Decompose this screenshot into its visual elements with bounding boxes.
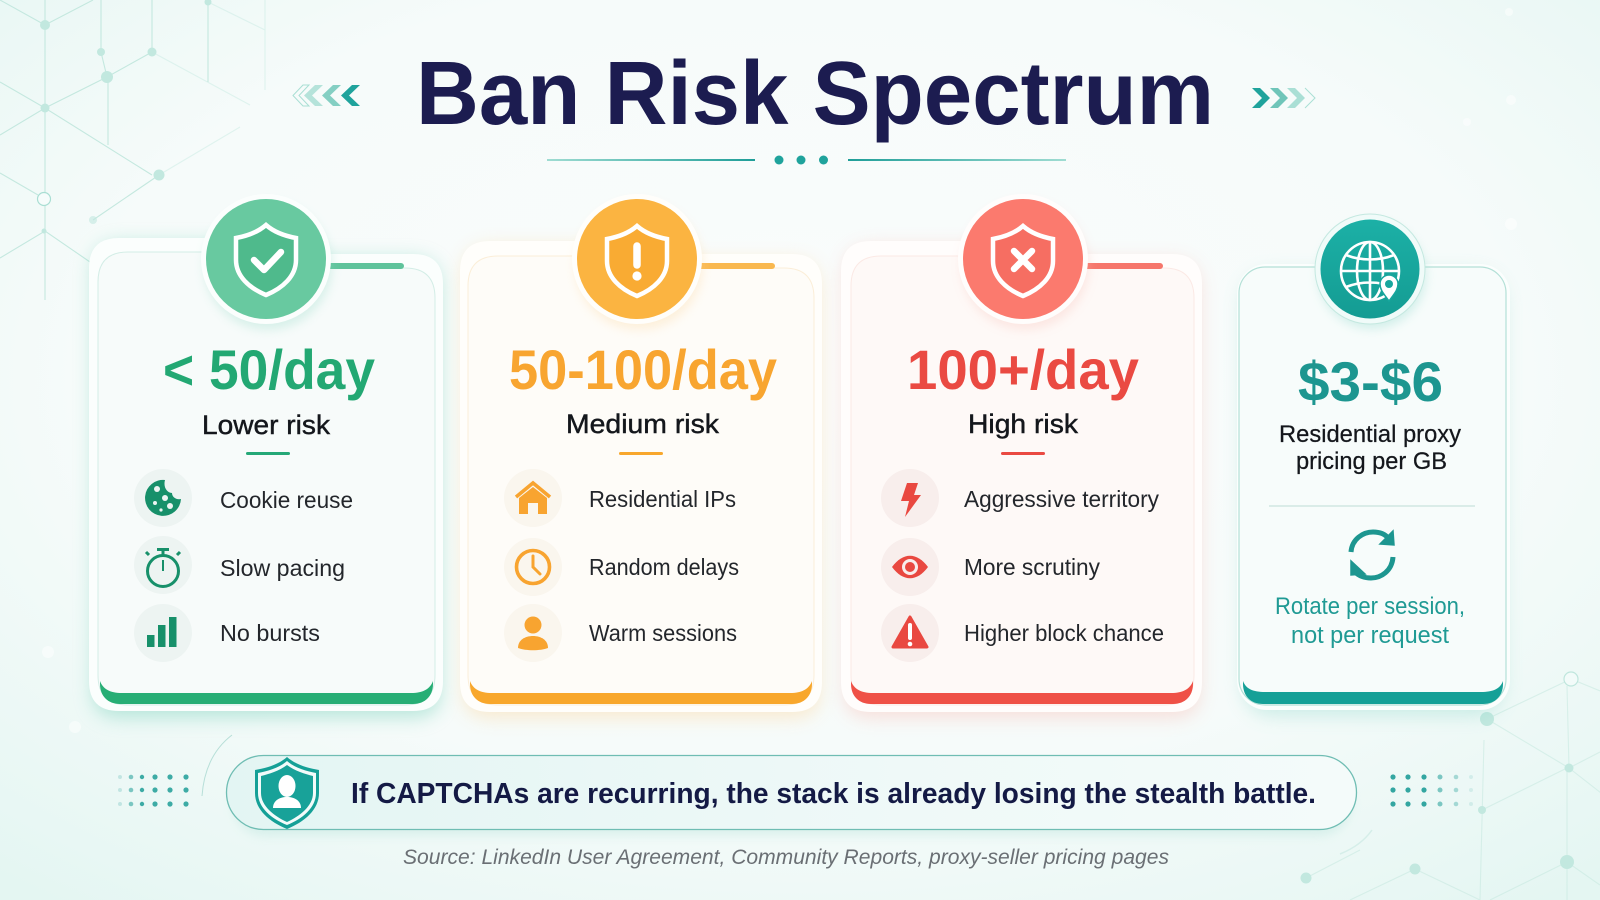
accent line: green <box>325 263 404 269</box>
bottom bar: red <box>851 681 1193 704</box>
accent line: orange <box>695 263 775 269</box>
bottom bar: orange <box>470 681 812 704</box>
stat: medium risk: 50-100/day <box>509 338 777 401</box>
icon: right chevrons <box>1252 88 1315 108</box>
text: proxy pricing: Residential proxy <box>1279 421 1461 448</box>
icon: clock <box>504 538 562 596</box>
icon: rotate arrows <box>1351 531 1394 578</box>
decorative dots right <box>1390 774 1473 807</box>
text: per gb: pricing per GB <box>1296 448 1447 475</box>
accent line: red <box>1080 263 1163 269</box>
stat: lower risk: < 50/day <box>163 338 375 401</box>
panel: lower risk <box>89 194 443 718</box>
panel: proxy pricing <box>1237 214 1510 716</box>
text: more scrutiny: More scrutiny <box>964 554 1100 580</box>
callout text: If CAPTCHAs are recurring, the stack is already losing the stealth battle. <box>351 778 1316 810</box>
text: random delays: Random delays <box>589 554 739 580</box>
icon: eye <box>881 538 939 596</box>
title divider <box>547 156 1066 164</box>
icon: shield user <box>255 757 319 829</box>
text: warm sessions: Warm sessions <box>589 620 737 646</box>
panel: high risk <box>841 194 1202 718</box>
icon: person <box>504 604 562 662</box>
icon: globe pin <box>1315 214 1426 329</box>
icon: shield alert <box>572 194 703 330</box>
icon: bolt <box>881 469 939 527</box>
icon: shield check <box>201 194 332 330</box>
text: no bursts: No bursts <box>220 620 320 646</box>
icon: bars <box>134 604 192 662</box>
icon: warning <box>881 604 939 662</box>
text: cookie reuse: Cookie reuse <box>220 487 353 513</box>
stat: high risk: 100+/day <box>907 338 1139 401</box>
text: residential ips: Residential IPs <box>589 486 736 512</box>
icon: left chevrons <box>293 85 360 106</box>
source note: Source: LinkedIn User Agreement, Community Reports, proxy-seller pricing pages <box>403 846 1169 869</box>
label: medium risk: Medium risk <box>566 409 720 439</box>
text: aggressive territory: Aggressive territory <box>964 486 1159 512</box>
icon: house <box>504 469 562 527</box>
label: lower risk: Lower risk <box>202 410 331 440</box>
text: higher block chance: Higher block chance <box>964 620 1164 646</box>
label: high risk: High risk <box>968 409 1079 439</box>
bottom bar: teal <box>1243 681 1503 704</box>
icon: shield x <box>958 194 1089 330</box>
icon: cookie <box>134 469 192 527</box>
callout banner <box>226 756 1356 836</box>
panel: medium risk <box>460 194 822 718</box>
text: slow pacing: Slow pacing <box>220 555 345 581</box>
text: rotate per session: Rotate per session, <box>1275 593 1465 620</box>
title: Ban Risk Spectrum <box>416 44 1214 144</box>
icon: stopwatch <box>134 536 192 594</box>
stat: price: $3-$6 <box>1298 350 1443 413</box>
bottom bar: green <box>100 681 433 704</box>
decorative dots left <box>118 774 189 807</box>
text: not per request: not per request <box>1291 622 1449 649</box>
